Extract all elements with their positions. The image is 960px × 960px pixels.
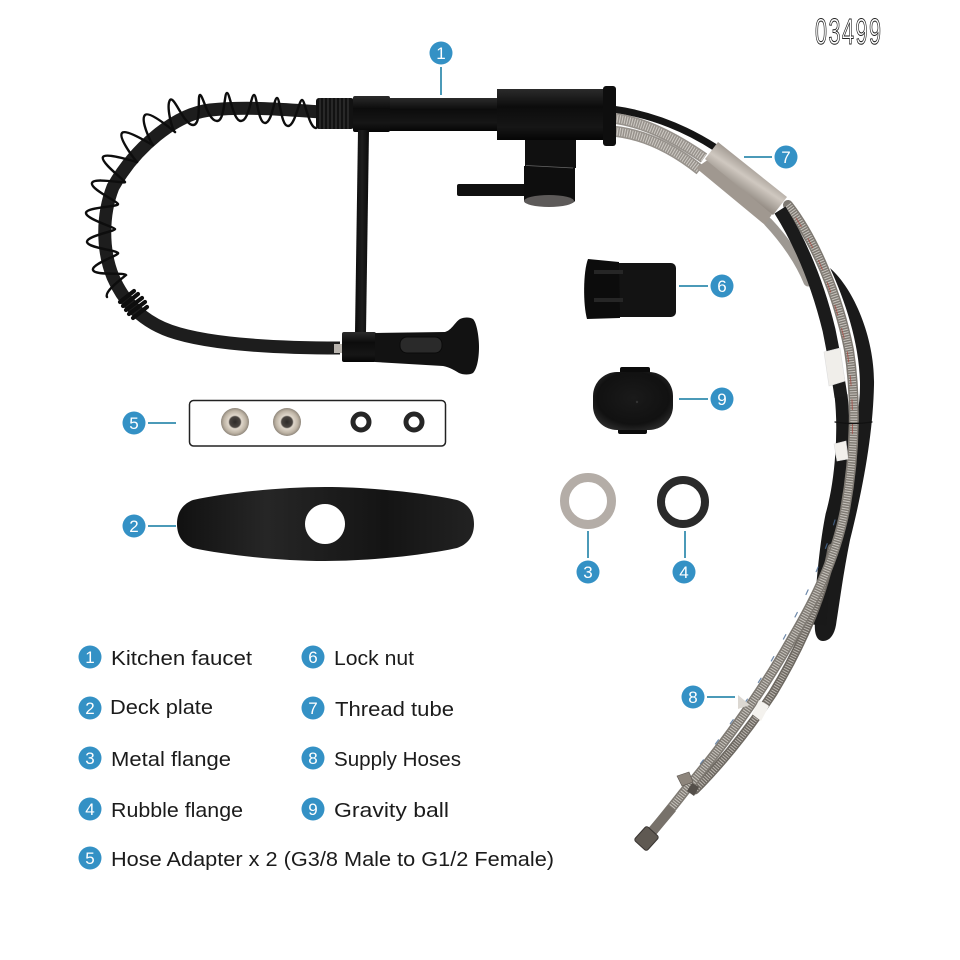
hose end nuts xyxy=(634,772,699,851)
legend item 9 xyxy=(302,798,449,822)
threaded neck xyxy=(316,98,354,129)
adapter 1 xyxy=(221,408,249,436)
callout 2: 2 xyxy=(129,517,139,536)
supply hoses and thread tube xyxy=(612,109,874,851)
callout 3 xyxy=(576,531,600,584)
legend item 2: Deck plate xyxy=(110,697,213,719)
legend item 3 xyxy=(78,746,231,771)
callout 9 xyxy=(679,388,734,410)
black outer hose and tongue xyxy=(612,109,874,641)
head cylinder xyxy=(497,89,607,140)
callout 3: 3 xyxy=(583,563,593,582)
legend item 7: 7 xyxy=(308,699,318,718)
legend item 6 xyxy=(302,646,414,670)
washer 2 xyxy=(406,414,422,430)
legend item 5: Hose Adapter x 2 (G3/8 Male to G1/2 Female) xyxy=(111,849,554,871)
legend item 2 xyxy=(78,696,213,720)
lock nut xyxy=(584,259,676,319)
spring end wraps xyxy=(120,291,147,318)
legend xyxy=(78,646,554,871)
callout 7: 7 xyxy=(781,148,791,167)
legend item 7: Thread tube xyxy=(335,699,454,721)
braided hose xyxy=(105,108,340,348)
callout 1 xyxy=(430,42,452,95)
end flange xyxy=(603,86,616,146)
hose adapter box xyxy=(190,400,446,446)
callout 8: 8 xyxy=(688,688,698,707)
inner black hose over metal xyxy=(780,210,841,397)
callout 5: 5 xyxy=(129,414,139,433)
callout 4: 4 xyxy=(679,563,689,582)
lever handle xyxy=(457,184,527,196)
white hose sleeves xyxy=(738,348,848,721)
legend item 8: Supply Hoses xyxy=(334,749,461,771)
sprayer button xyxy=(400,337,442,353)
callout 2 xyxy=(122,514,176,538)
callout 1: 1 xyxy=(436,44,446,63)
pull-down sprayer xyxy=(334,318,479,374)
callout 9: 9 xyxy=(717,390,727,409)
watermark code: 03499 xyxy=(815,12,881,52)
legend item 7 xyxy=(302,696,454,721)
washer 1 xyxy=(353,414,369,430)
front supply hose xyxy=(612,118,854,832)
legend item 9: 9 xyxy=(308,800,318,819)
adapter 2 xyxy=(273,408,301,436)
collar xyxy=(353,96,390,132)
gravity ball xyxy=(593,367,673,434)
legend item 8 xyxy=(302,746,461,771)
kitchen faucet body xyxy=(316,86,616,333)
callout 7 xyxy=(744,146,798,168)
callout 8 xyxy=(682,686,735,708)
callout 6 xyxy=(679,274,734,298)
body neck xyxy=(525,112,576,168)
legend item 9: Gravity ball xyxy=(334,800,449,822)
thread tube sleeve xyxy=(696,142,787,225)
valve base xyxy=(524,166,575,206)
rear supply hose xyxy=(612,131,832,790)
vertical support rod xyxy=(355,130,369,333)
legend item 4: 4 xyxy=(85,800,95,819)
valve base bottom xyxy=(524,195,574,207)
spout tube xyxy=(388,98,500,131)
legend item 4: Rubble flange xyxy=(111,800,243,822)
rubber flange xyxy=(661,480,705,524)
legend item 5: 5 xyxy=(85,849,95,868)
legend item 1 xyxy=(78,646,252,670)
callout 4 xyxy=(672,531,696,584)
callout 5 xyxy=(122,412,176,434)
legend item 8: 8 xyxy=(308,749,318,768)
legend item 2: 2 xyxy=(85,699,95,718)
legend item 1: Kitchen faucet xyxy=(111,648,252,670)
callout 6: 6 xyxy=(717,277,727,296)
spring coils xyxy=(86,93,316,297)
deck plate xyxy=(177,487,474,561)
legend item 3: Metal flange xyxy=(111,749,231,771)
legend item 3: 3 xyxy=(85,749,95,768)
cable tie xyxy=(835,422,872,424)
legend item 6: Lock nut xyxy=(334,648,414,670)
legend item 6: 6 xyxy=(308,648,318,667)
legend item 1: 1 xyxy=(85,648,95,667)
legend item 4 xyxy=(78,798,243,822)
braided pull-down hose with spring xyxy=(86,93,340,348)
metal flange xyxy=(564,478,612,524)
